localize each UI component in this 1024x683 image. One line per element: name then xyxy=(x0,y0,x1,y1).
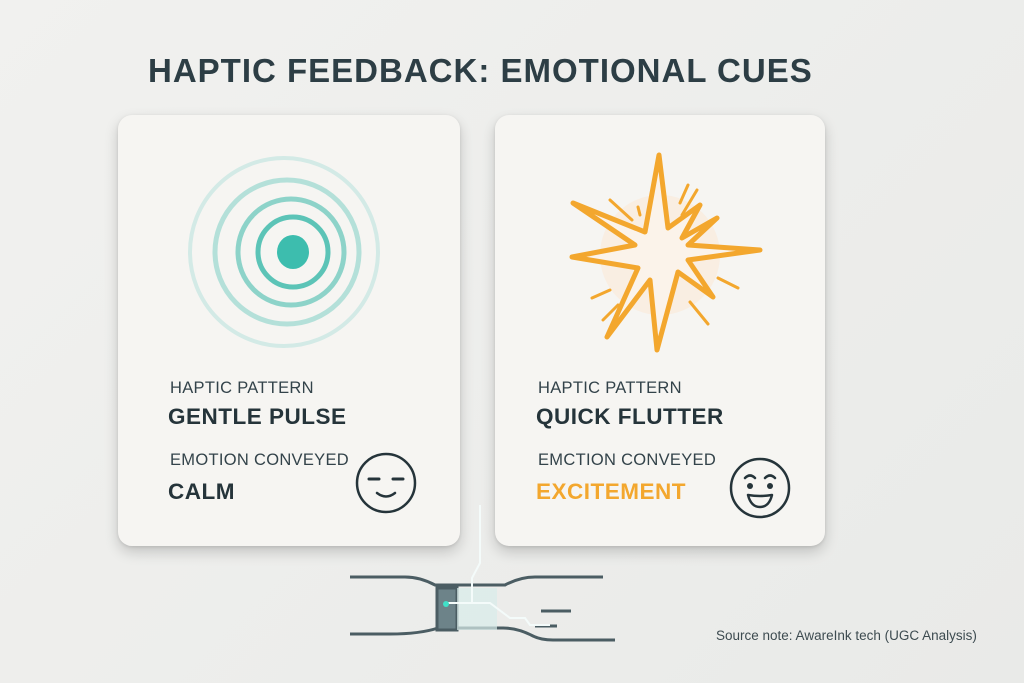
text: quick flutter: QUICK FLUTTER xyxy=(536,404,724,429)
panel: quick flutter xyxy=(495,115,825,546)
icon: happy face xyxy=(730,458,790,518)
icon: pulse rings xyxy=(188,156,380,348)
source note: Source note: AwareInk tech (UGC Analysis) xyxy=(716,628,977,643)
icon: calm face xyxy=(356,452,416,514)
title: HAPTIC FEEDBACK: EMOTIONAL CUES xyxy=(148,52,813,89)
text: gentle pulse: GENTLE PULSE xyxy=(168,404,347,429)
text: calm: CALM xyxy=(168,479,235,504)
text: emotion label: EMOTION CONVEYED xyxy=(170,451,349,469)
text: haptic pattern label: HAPTIC PATTERN xyxy=(170,379,314,397)
text: haptic pattern label: HAPTIC PATTERN xyxy=(538,379,682,397)
text: excitement: EXCITEMENT xyxy=(536,479,686,504)
panel: gentle pulse xyxy=(118,115,460,546)
text: emotion label: EMCTION CONVEYED xyxy=(538,451,716,469)
